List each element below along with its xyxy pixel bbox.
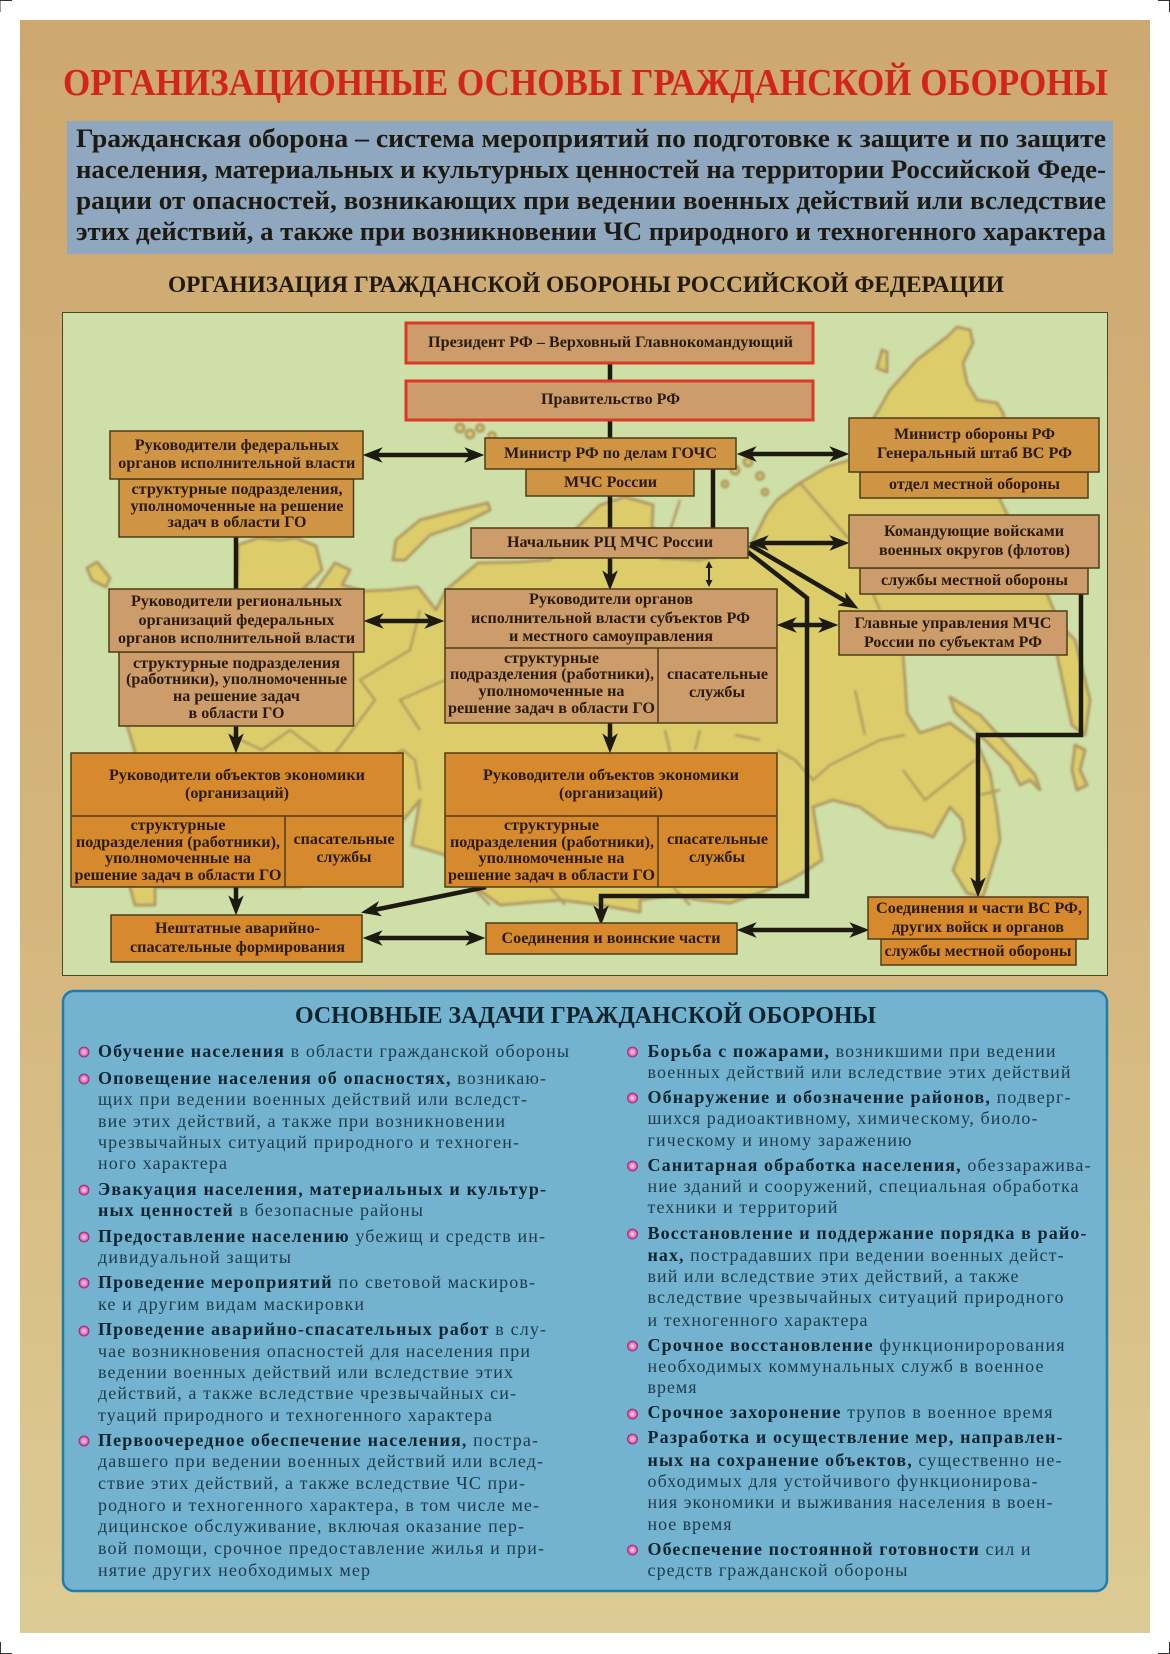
box: Government: Правительство РФ: [541, 391, 680, 408]
box: Minister of Defense: Генеральный штаб ВС РФ: [877, 445, 1072, 462]
box: economy objects center: Руководители объектов экономики: [483, 767, 739, 784]
task: warning: [79, 1068, 546, 1173]
box: economy objects center: [445, 753, 777, 887]
box: economy objects left: структурные: [130, 817, 226, 834]
right column of tasks: [628, 1041, 1090, 1580]
task: evacuation: [79, 1179, 546, 1220]
box: military units: [486, 923, 737, 954]
task: priority support: родного и техногенного характера, в том числе ме-: [98, 1495, 539, 1515]
box: economy objects left: подразделения (работники),: [76, 834, 280, 851]
box: executive authorities of RF subjects: уполномоченные на: [478, 683, 625, 700]
box: federal executive leaders: органов исполнительной власти: [118, 455, 355, 472]
task: preservation measures: обходимых для устойчивого функционирова-: [648, 1471, 1038, 1491]
title: ОРГАНИЗАЦИОННЫЕ ОСНОВЫ ГРАЖДАНСКОЙ ОБОРОНЫ: [63, 62, 1108, 104]
box: economy objects center: подразделения (работники),: [450, 834, 654, 851]
box: regional organizations: на решение задач: [173, 688, 300, 705]
box: district commanders: Командующие войсками: [884, 523, 1064, 540]
box: main directorates: Главные управления МЧС: [854, 615, 1052, 632]
definition block: этих действий, а также при возникновении ЧС природного и техногенного характера: [76, 217, 1106, 246]
task: preservation measures: ных на сохранение объектов, существенно не-: [648, 1450, 1062, 1470]
regional borders: [230, 483, 1000, 905]
task: rescue works: ведении военных действий или вследствие этих: [98, 1362, 513, 1382]
organization heading: ОРГАНИЗАЦИЯ ГРАЖДАНСКОЙ ОБОРОНЫ РОССИЙСКОЙ ФЕДЕРАЦИИ: [168, 272, 1004, 298]
box: federal executive leaders: структурные подразделения,: [132, 481, 343, 498]
task: urgent restoration: Срочное восстановление функционирорования: [648, 1335, 1064, 1355]
box: Minister of Emergency Situations: МЧС России: [564, 474, 657, 491]
box: Minister of Defense: [849, 418, 1099, 498]
task: shelters: [79, 1226, 545, 1267]
box: military units: Соединения и воинские части: [502, 930, 721, 947]
task: preservation measures: [628, 1427, 1062, 1534]
box: executive authorities of RF subjects: [445, 589, 777, 723]
box: regional organizations: в области ГО: [188, 705, 284, 722]
task: sanitation: техники и территорий: [648, 1197, 838, 1217]
task: detection of areas: Обнаружение и обозначение районов, подверг-: [648, 1087, 1070, 1107]
box: regional organizations: организаций федеральных: [138, 612, 335, 629]
box: district commanders: военных округов (флотов): [879, 542, 1070, 559]
task: preservation measures: ния экономики и выживания населения в воен-: [648, 1492, 1052, 1512]
box: President: Президент РФ – Верховный Главнокомандующий: [428, 334, 793, 351]
box: federal executive leaders: уполномоченные на решение: [130, 498, 344, 515]
task: order: Восстановление и поддержание порядка в райо-: [648, 1223, 1086, 1243]
task: priority support: ствие этих действий, а также вследствие ЧС при-: [98, 1473, 525, 1493]
task: order: [628, 1223, 1086, 1330]
task: order: вий или вследствие этих действий, а также: [648, 1266, 1018, 1286]
box: main directorates: России по субъектам РФ: [864, 634, 1042, 651]
box: district commanders: [849, 515, 1099, 594]
box: regional organizations: [109, 589, 364, 726]
task: priority support: [79, 1430, 544, 1580]
box: President: [406, 323, 813, 363]
box: regional organizations: Руководители региональных: [131, 593, 342, 610]
definition block: [67, 121, 1113, 254]
task: camouflage: Проведение мероприятий по световой маскиров-: [98, 1272, 535, 1292]
box: economy objects left: службы: [316, 849, 372, 866]
box: armed forces units: службы местной обороны: [884, 943, 1072, 960]
task: detection of areas: гическому и иному заражению: [648, 1130, 912, 1150]
task: burial: Срочное захоронение трупов в военное время: [648, 1402, 1052, 1422]
task: sanitation: Санитарная обработка населения, обеззаражива-: [648, 1155, 1090, 1175]
box: economy objects left: решение задач в области ГО: [74, 867, 282, 884]
box: executive authorities of RF subjects: спасательные: [667, 666, 768, 683]
task: preservation measures: Разработка и осуществление мер, направлен-: [648, 1427, 1062, 1447]
task: priority support: вой помощи, срочное предоставление жилья и при-: [98, 1538, 544, 1558]
box: economy objects left: уполномоченные на: [105, 850, 251, 867]
box: economy objects center: структурные: [504, 817, 599, 834]
box: executive authorities of RF subjects: и местного самоуправления: [509, 628, 713, 645]
box: economy objects left: Руководители объектов экономики: [109, 767, 365, 784]
task: readiness: Обеспечение постоянной готовности сил и: [648, 1539, 1031, 1559]
task: warning: щих при ведении военных действий или вследст-: [98, 1089, 527, 1109]
box: regional organizations: структурные подразделения: [133, 655, 340, 672]
box: economy objects center: решение задач в области ГО: [448, 867, 655, 884]
task: training: Обучение населения в области гражданской обороны: [98, 1041, 569, 1061]
task: firefighting: военных действий или вследствие этих действий: [648, 1062, 1071, 1082]
box: economy objects left: спасательные: [294, 831, 395, 848]
box: executive authorities of RF subjects: решение задач в области ГО: [448, 700, 655, 717]
task: warning: вие этих действий, а также при возникновении: [98, 1111, 505, 1131]
task: readiness: средств гражданской обороны: [648, 1560, 908, 1580]
task: rescue works: туаций природного и техногенного характера: [98, 1405, 492, 1425]
panel: main tasks: [63, 991, 1107, 1591]
task: camouflage: ке и другим видам маскировки: [98, 1294, 364, 1314]
box: executive authorities of RF subjects: исполнительной власти субъектов РФ: [471, 610, 750, 627]
box: armed forces units: [868, 897, 1088, 965]
task: priority support: дицинское обслуживание, включая оказание пер-: [98, 1516, 524, 1536]
task: warning: ного характера: [98, 1153, 227, 1173]
box: Minister of Emergency Situations: Министр РФ по делам ГОЧС: [504, 445, 717, 462]
box: federal executive leaders: [110, 431, 363, 537]
box: Minister of Defense: Министр обороны РФ: [894, 426, 1055, 443]
box: head of regional center: [471, 528, 748, 558]
box: economy objects center: уполномоченные на: [478, 850, 625, 867]
task: readiness: [628, 1539, 1031, 1580]
task: priority support: давшего при ведении военных действий или вслед-: [98, 1451, 543, 1471]
task: firefighting: [628, 1041, 1071, 1082]
task: evacuation: Эвакуация населения, материальных и культур-: [98, 1179, 546, 1199]
box: economy objects left: (организаций): [185, 785, 289, 802]
definition block: населения, материальных и культурных ценностей на территории Российской Феде-: [76, 155, 1106, 184]
box: Minister of Defense: отдел местной обороны: [889, 476, 1060, 493]
definition block: рации от опасностей, возникающих при ведении военных действий или вследствие: [76, 186, 1106, 215]
task: urgent restoration: [628, 1335, 1064, 1397]
task: sanitation: ние зданий и сооружений, специальная обработка: [648, 1176, 1078, 1196]
connector lines: [236, 363, 1081, 938]
task: shelters: дивидуальной защиты: [98, 1247, 291, 1267]
box: main directorates: [839, 611, 1067, 655]
box: regional organizations: органов исполнительной власти: [118, 630, 355, 647]
task: sanitation: [628, 1155, 1090, 1217]
box: economy objects left: [71, 753, 403, 887]
task: camouflage: [79, 1272, 535, 1314]
box: economy objects center: службы: [689, 849, 745, 866]
box: federal executive leaders: Руководители федеральных: [135, 437, 339, 454]
task: warning: Оповещение населения об опасностях, возникаю-: [98, 1068, 546, 1088]
task: order: вследствие чрезвычайных ситуаций природного: [648, 1287, 1064, 1307]
panel: organization chart: [62, 312, 1108, 976]
task: urgent restoration: время: [648, 1377, 696, 1397]
box: executive authorities of RF subjects: подразделения (работники),: [450, 666, 654, 683]
box: federal executive leaders: задач в области ГО: [168, 514, 306, 531]
box: executive authorities of RF subjects: Руководители органов: [529, 591, 693, 608]
task: priority support: Первоочередное обеспечение населения, постра-: [98, 1430, 538, 1450]
box: district commanders: службы местной обороны: [881, 572, 1068, 589]
box: non-staff rescue formations: спасательные формирования: [130, 939, 345, 956]
box: Minister of Emergency Situations: [485, 438, 736, 496]
task: preservation measures: ное время: [648, 1514, 732, 1534]
task: evacuation: ных ценностей в безопасные районы: [98, 1200, 423, 1220]
task: order: и техногенного характера: [648, 1310, 868, 1330]
task: rescue works: [79, 1319, 546, 1425]
task: order: нах, пострадавших при ведении военных дейст-: [648, 1245, 1064, 1265]
task: warning: чрезвычайных ситуаций природного и техноген-: [98, 1132, 519, 1152]
box: regional organizations: (работники), уполномоченные: [126, 671, 347, 688]
box: executive authorities of RF subjects: структурные: [504, 650, 599, 667]
task: detection of areas: [628, 1087, 1070, 1150]
task: priority support: нятие других необходимых мер: [98, 1560, 370, 1580]
box: economy objects center: (организаций): [559, 785, 663, 802]
box: executive authorities of RF subjects: службы: [689, 684, 745, 701]
tasks heading: ОСНОВНЫЕ ЗАДАЧИ ГРАЖДАНСКОЙ ОБОРОНЫ: [295, 1003, 876, 1029]
box: armed forces units: Соединения и части ВС РФ,: [876, 900, 1082, 917]
task: rescue works: Проведение аварийно-спасательных работ в слу-: [98, 1319, 546, 1339]
box: non-staff rescue formations: Нештатные аварийно-: [155, 920, 320, 937]
left column of tasks: [79, 1041, 569, 1580]
definition block: Гражданская оборона – система мероприятий по подготовке к защите и по защите: [76, 124, 1106, 153]
box: Government: [406, 381, 813, 420]
map of Russia: [87, 327, 1090, 912]
box: economy objects center: спасательные: [667, 831, 768, 848]
task: shelters: Предоставление населению убежищ и средств ин-: [98, 1226, 545, 1246]
box: armed forces units: других войск и органов: [892, 919, 1064, 936]
task: urgent restoration: необходимых коммунальных служб в военное: [648, 1356, 1044, 1376]
task: firefighting: Борьба с пожарами, возникшими при ведении: [648, 1041, 1056, 1061]
box: head of regional center: Начальник РЦ МЧС России: [507, 534, 713, 551]
box: non-staff rescue formations: [111, 915, 362, 962]
task: detection of areas: шихся радиоактивному, химическому, биоло-: [648, 1108, 1038, 1128]
task: rescue works: чае возникновения опасностей для населения при: [98, 1341, 530, 1361]
task: rescue works: действий, а также вследствие чрезвычайных си-: [98, 1383, 516, 1403]
